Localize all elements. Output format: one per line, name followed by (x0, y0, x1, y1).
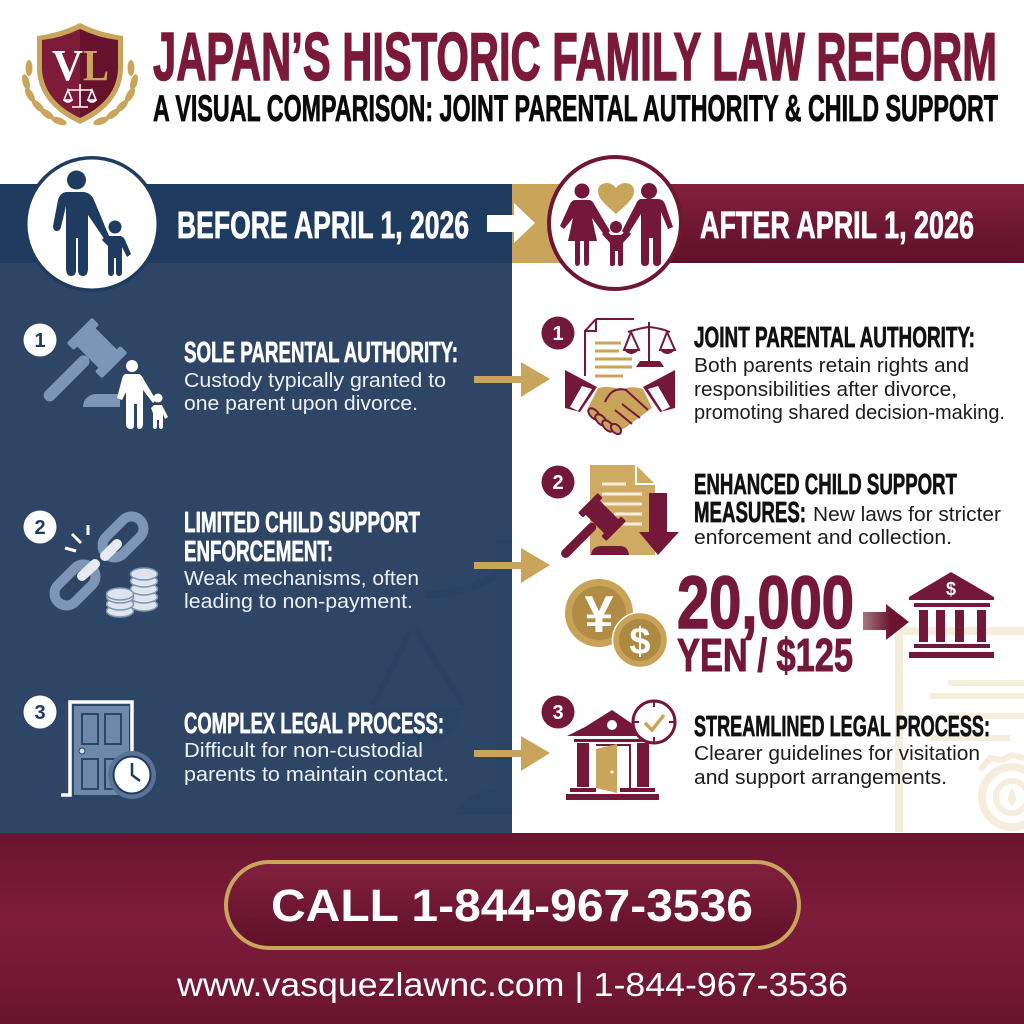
icon: broken chain and coins (50, 512, 157, 617)
icon: door and clock (61, 702, 156, 799)
item: before 1 (24, 318, 458, 429)
monogram: V (52, 41, 83, 90)
watermark: scales of justice (372, 540, 512, 815)
text block: promoting shared decision-making. (694, 401, 1005, 424)
arrow: row 1 (474, 362, 550, 397)
icon: family (549, 157, 681, 289)
laurel left (21, 60, 68, 127)
text block (694, 322, 1005, 424)
amount: 20,000 (677, 561, 854, 644)
text block: enforcement and collection. (694, 526, 952, 549)
footer (0, 833, 1024, 1024)
number 2 (542, 466, 574, 498)
text block (694, 469, 1001, 549)
heading: before date: BEFORE APRIL 1, 2026 (177, 205, 469, 247)
text block: SOLE PARENTAL AUTHORITY: (184, 337, 458, 369)
number 1: 1 (34, 330, 46, 352)
text block: parents to maintain contact. (184, 763, 449, 786)
monogram: L (83, 41, 109, 90)
icon: bank: $ (946, 579, 956, 599)
text block: Clearer guidelines for visitation (694, 742, 980, 765)
icon: courthouse and clock (566, 701, 675, 800)
number 3: 3 (552, 702, 564, 724)
icon: coins (565, 579, 668, 668)
panel: before (0, 263, 512, 833)
text block: one parent upon divorce. (184, 392, 418, 415)
text block: Weak mechanisms, often (184, 567, 419, 590)
icon: gavel and parent (28, 318, 168, 429)
arrow (863, 604, 909, 640)
arrow: before to after (487, 203, 535, 243)
call button: CALL 1-844-967-3536 (271, 880, 753, 931)
text block: responsibilities after divorce, (694, 378, 957, 401)
item: before 3 (24, 696, 449, 799)
shield (37, 23, 123, 124)
icon: coins: ¥ (585, 586, 614, 644)
number 3 (24, 696, 56, 728)
text block (184, 337, 458, 415)
call button (226, 862, 799, 948)
number 1 (24, 324, 56, 356)
icon: coins: $ (629, 621, 651, 663)
text block: and support arrangements. (694, 766, 947, 789)
number 2: 2 (552, 472, 564, 494)
logo (21, 23, 139, 127)
text block: COMPLEX LEGAL PROCESS: (184, 708, 444, 740)
watermark: certificate (899, 631, 1024, 832)
text block: Difficult for non-custodial (184, 739, 423, 762)
text block: Both parents retain rights and (694, 354, 969, 377)
icon: document, scales and handshake (565, 319, 675, 436)
currency: YEN / $125 (677, 629, 853, 681)
number 1 (542, 316, 574, 350)
item: after 3 (542, 696, 990, 800)
laurel right (92, 60, 139, 127)
item: after 1 (542, 316, 1005, 436)
website and phone: www.vasquezlawnc.com | 1-844-967-3536 (176, 966, 848, 1003)
number 2 (24, 510, 56, 544)
header band: before (0, 156, 512, 292)
icon: parent and child (24, 156, 160, 292)
text block: leading to non-payment. (184, 590, 413, 613)
text block (694, 711, 990, 789)
text block: LIMITED CHILD SUPPORT (184, 507, 420, 539)
number 1: 1 (552, 323, 564, 345)
scales in shield (64, 84, 96, 107)
icon: bank (909, 572, 994, 658)
number 2: 2 (34, 517, 46, 539)
arrow: row 2 (474, 548, 550, 583)
number 3 (542, 696, 574, 728)
text block: New laws for stricter (813, 503, 1001, 526)
text block (184, 507, 420, 613)
text block: ENFORCEMENT: (184, 536, 333, 568)
arrow: row 3 (474, 736, 550, 771)
text block (184, 708, 449, 786)
icon: document, gavel and down arrow (548, 465, 679, 571)
text block: MEASURES: (694, 497, 806, 529)
text block: Custody typically granted to (184, 369, 446, 392)
item: before 2 (24, 507, 420, 617)
callout: 20,000 yen (565, 561, 994, 681)
panel: after (512, 263, 1024, 833)
monogram (52, 41, 109, 90)
number 3: 3 (34, 702, 46, 724)
item: after 2 (542, 465, 1001, 571)
header band: after (512, 157, 1024, 289)
